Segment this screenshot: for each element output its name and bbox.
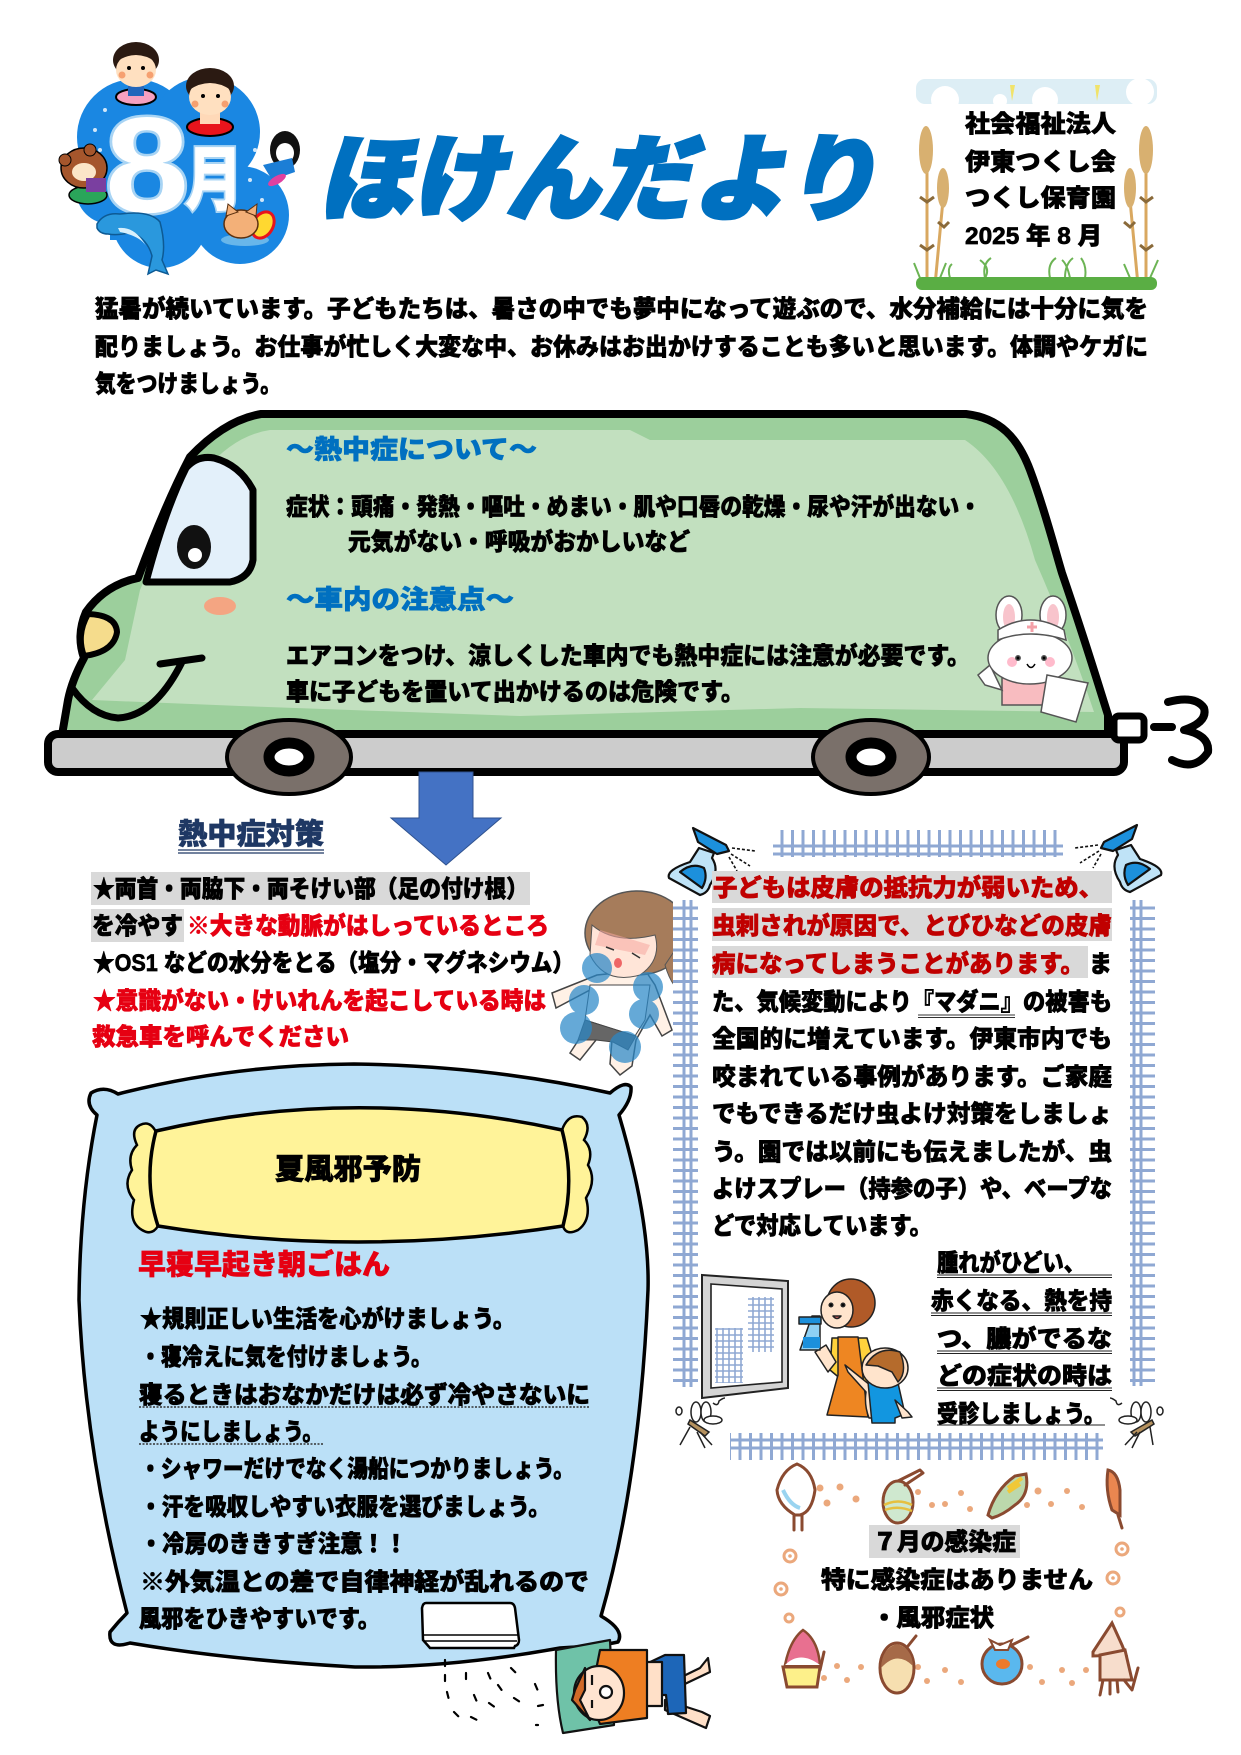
- body text: 全国的に増えています。伊東市内でも: [712, 1025, 1112, 1053]
- body text: 咬まれている事例があります。ご家庭: [712, 1063, 1112, 1091]
- panel: organisation box: [914, 78, 1158, 290]
- icon: grilled corn: [988, 1474, 1027, 1518]
- heading: about heatstroke: ～熱中症について～: [286, 434, 537, 464]
- text block: countermeasure list: [91, 872, 574, 1051]
- text block: when to see a doctor: どの症状の時は: [937, 1363, 1112, 1390]
- red emphasised text: 病になってしまうことがあります。: [712, 950, 1084, 978]
- nursery name: つくし保育園: [965, 185, 1116, 212]
- body text: た、気候変動により『マダニ』の被害も: [712, 988, 1112, 1016]
- panel frame: stitched border: [673, 830, 1155, 1460]
- panel: summer cold pillow: [79, 1064, 710, 1733]
- heading: heatstroke countermeasures: 熱中症対策: [178, 818, 324, 851]
- red note on arteries: ※大きな動脈がはしっているところ: [187, 912, 549, 940]
- no infections statement: 特に感染症はありません: [821, 1566, 1093, 1594]
- symptoms text: 元気がない・呼吸がおかしいなど: [348, 528, 690, 556]
- front wheel: [227, 720, 351, 794]
- text block: introduction: 猛暑が続いています。子どもたちは、暑さの中でも夢中になって遊ぶので、水分補給には十分に気を: [95, 295, 1148, 323]
- pillow shape: [79, 1064, 648, 1667]
- red emphasised text: 子どもは皮膚の抵抗力が弱いため、: [713, 874, 1103, 902]
- body text: [712, 951, 1112, 1240]
- date: 2025 年 8 月: [965, 223, 1102, 250]
- swimmer kid 2: [186, 68, 234, 136]
- advice list: ※外気温との差で自律神経が乱れるので: [140, 1568, 589, 1596]
- text block: introduction: 気をつけましょう。: [95, 370, 281, 398]
- advice list: 風邪をひきやすいです。: [139, 1606, 380, 1633]
- rear wheel: [813, 720, 929, 794]
- precautions text: 車に子どもを置いて出かけるのは危険です。: [286, 679, 744, 706]
- advice list: 寝るときはおなかだけは必ず冷やさないに: [139, 1381, 590, 1409]
- advice list: ・寝冷えに気を付けましょう。: [140, 1343, 432, 1371]
- red subheading: 早寝早起き朝ごはん: [138, 1248, 390, 1280]
- panel: smiling green bus about heatstroke: [48, 414, 1208, 794]
- decorative festival border: dots and swirls: [775, 1484, 1128, 1686]
- text block: when to see a doctor: 腫れがひどい、: [937, 1249, 1085, 1277]
- emergency warning: 救急車を呼んでください: [92, 1024, 349, 1051]
- icon: takoyaki: [880, 1636, 916, 1693]
- icon: shaved ice: [783, 1630, 824, 1687]
- month kanji: 月: [185, 141, 243, 219]
- text block: when to see a doctor: つ、膿がでるな: [937, 1325, 1112, 1353]
- symptoms text: [286, 493, 981, 556]
- icon: left mosquito: [676, 1398, 725, 1448]
- precautions text: [286, 642, 970, 706]
- penguin on float: [263, 131, 300, 188]
- bumper: [48, 734, 1124, 772]
- icon: water yo-yo: [883, 1470, 923, 1523]
- smile: [72, 658, 202, 718]
- icon: sleeping boy: [556, 1640, 710, 1733]
- arrow: down to countermeasures: [391, 772, 501, 865]
- icon: nurse rabbit: [978, 596, 1088, 722]
- icon: child with cooling points: [552, 891, 689, 1075]
- body text: う。園では以前にも伝えましたが、虫: [712, 1138, 1112, 1166]
- advice list: ★規則正しい生活を心がけましょう。: [140, 1305, 515, 1333]
- icon: goldfish bag: [982, 1637, 1028, 1684]
- kitten on surfboard: [221, 204, 279, 246]
- body text: どで対応しています。: [712, 1213, 932, 1240]
- text block: infections in July: [821, 1525, 1093, 1632]
- body text: でもできるだけ虫よけ対策をしましょ: [712, 1100, 1112, 1128]
- icon: window screen being sprayed: [702, 1275, 788, 1398]
- heading: in-car precautions: ～車内の注意点～: [286, 584, 514, 614]
- month numeral: 8: [105, 89, 189, 241]
- emergency warning: [92, 987, 546, 1051]
- logo: August badge with swimmers: [59, 42, 300, 274]
- advice list: ようにしましょう。: [139, 1419, 323, 1446]
- dolphin: [97, 213, 168, 274]
- red emphasised text: [712, 874, 1112, 978]
- heading: July infections: ７月の感染症: [873, 1528, 1016, 1556]
- bear on float: [59, 144, 107, 204]
- body text: よけスプレー（持参の子）や、ベープな: [712, 1176, 1112, 1203]
- icon: sausage on stick: [1107, 1470, 1122, 1528]
- nose headlight: [81, 614, 117, 656]
- precautions text: エアコンをつけ、涼しくした車内でも熱中症には注意が必要です。: [286, 642, 970, 670]
- advice list: ・冷房のききすぎ注意！！: [140, 1530, 407, 1558]
- text block: introduction: 配りましょう。お仕事が忙しく大変な中、お休みはお出かけすることも多いと思います。体調やケガに: [95, 333, 1148, 361]
- text block: when to see a doctor: 赤くなる、熱を持: [931, 1288, 1112, 1315]
- text block: introduction: [95, 295, 1148, 398]
- eye: [177, 525, 211, 569]
- sky strip: [916, 78, 1157, 114]
- cheek: [204, 597, 236, 615]
- red emphasised text: 虫刺されが原因で、とびひなどの皮膚: [712, 912, 1112, 940]
- highlight line 2: を冷やす: [92, 913, 183, 940]
- icon: right mosquito: [1110, 1398, 1163, 1448]
- grey highlights: [712, 871, 1112, 978]
- air flow dashes: [445, 1660, 543, 1725]
- icon: squid: [1093, 1623, 1138, 1695]
- icon: mother with spray and child: [799, 1279, 912, 1423]
- advice list: ・汗を吸収しやすい衣服を選びましょう。: [140, 1494, 550, 1521]
- exhaust muffler and puff: [1114, 700, 1208, 764]
- icon: air conditioner: [422, 1603, 519, 1648]
- cold symptoms: ・風邪症状: [872, 1605, 994, 1632]
- text block: when to see a doctor: 受診しましょう。: [937, 1401, 1105, 1428]
- organisation name: 社会福祉法人: [965, 111, 1116, 138]
- swimmer kid 1: [113, 42, 159, 105]
- advice list: ・シャワーだけでなく湯船につかりましょう。: [140, 1456, 574, 1483]
- text block: when to see a doctor: [931, 1249, 1112, 1428]
- yellow bolster: [127, 1108, 592, 1242]
- title: ほけんだより: [314, 128, 896, 232]
- advice list: [139, 1305, 590, 1633]
- icon: left spray bottle: [669, 828, 755, 895]
- bus body: [62, 414, 1108, 735]
- association name: 伊東つくし会: [965, 149, 1116, 176]
- highlight line 1: ★両首・両脇下・両そけい部（足の付け根）: [93, 875, 528, 903]
- icon: right spray bottle: [1075, 825, 1161, 892]
- symptoms text: 症状：頭痛・発熱・嘔吐・めまい・肌や口唇の乾燥・尿や汗が出ない・: [286, 493, 981, 521]
- icon: cotton candy: [777, 1464, 815, 1530]
- horsetail plants and grass: [914, 126, 1158, 290]
- hydration line: ★OS1 などの水分をとる（塩分・マグネシウム）: [93, 949, 574, 977]
- heading: summer cold prevention: 夏風邪予防: [275, 1153, 421, 1186]
- body text: ま: [1089, 951, 1112, 978]
- windshield: [146, 457, 253, 582]
- text block: insect bite article: [712, 871, 1112, 1240]
- emergency warning: ★意識がない・けいれんを起こしている時は: [93, 987, 546, 1015]
